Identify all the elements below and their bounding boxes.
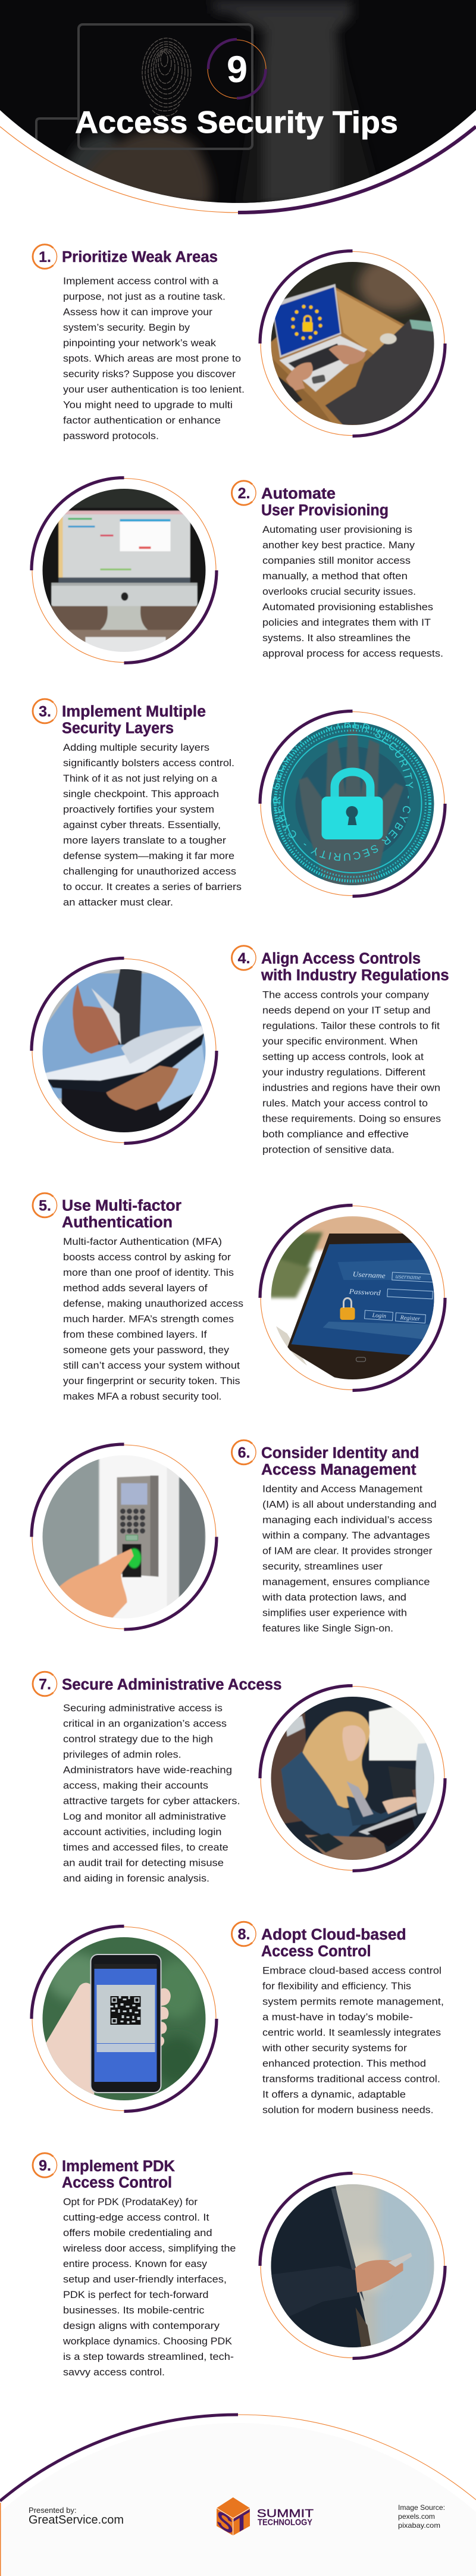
panel: tip 3 <box>32 698 447 908</box>
body text: more than one proof of identity. This <box>63 1267 234 1278</box>
heading: User Provisioning <box>261 502 389 519</box>
number badge <box>33 245 57 268</box>
big number 9: 9 <box>227 49 248 90</box>
body text: system permits remote management, <box>262 1996 444 2007</box>
body text: businesses. Its mobile-centric <box>63 2305 205 2316</box>
heading: Prioritize Weak Areas <box>62 249 218 266</box>
heading: Secure Administrative Access <box>62 1676 281 1693</box>
body text: another key best practice. Many <box>262 539 415 551</box>
body text: more layers translate to a tougher <box>63 835 226 846</box>
body text: someone gets your password, they <box>63 1344 230 1356</box>
panel: tip 6 <box>32 1440 437 1634</box>
body text: Automated provisioning establishes <box>262 601 433 613</box>
body text: and aiding in forensic analysis. <box>63 1873 209 1884</box>
coat <box>281 1751 362 1837</box>
body text: your user authentication is too lenient. <box>63 383 245 395</box>
number badge: 6. <box>238 1444 250 1461</box>
logo <box>217 2497 314 2541</box>
heading <box>261 1926 406 1960</box>
header ring: purple half <box>238 127 476 213</box>
logo cube: S <box>217 2505 233 2541</box>
body text: transforms traditional access control. <box>262 2073 440 2085</box>
body text: features like Single Sign-on. <box>262 1623 393 1634</box>
number badge: 3. <box>39 704 51 720</box>
body text: manually, a method that often <box>262 570 408 582</box>
photo: tablet login screen: Register <box>399 1314 420 1322</box>
body text: workplace dynamics. Choosing PDK <box>62 2335 233 2347</box>
logo cube: T <box>233 2505 250 2541</box>
body text: Opt for PDK (ProdataKey) for <box>63 2196 198 2207</box>
heading: Implement Multiple <box>62 704 206 720</box>
photo: phone showing QR code <box>32 1926 217 2111</box>
number badge <box>231 946 256 970</box>
body text: critical in an organization’s access <box>63 1718 227 1729</box>
panel: tip 5 <box>33 1193 445 1402</box>
footer ring: orange half <box>238 2415 476 2500</box>
body text: simplifies user experience with <box>262 1607 407 1618</box>
number badge <box>231 481 256 505</box>
body text: solution for modern business needs. <box>262 2104 434 2116</box>
heading <box>261 1445 419 1478</box>
body text: regulations. Tailor these controls to fit <box>262 1020 440 1031</box>
lock and stars <box>292 305 322 340</box>
body text: your specific environment. When <box>262 1036 418 1047</box>
body text: setting up access controls, look at <box>262 1051 424 1062</box>
body text: systems. It also streamlines the <box>262 632 411 644</box>
heading <box>261 950 449 983</box>
body text <box>63 742 242 908</box>
body text: Log and monitor all administrative <box>63 1811 226 1822</box>
body text: security, streamlines user <box>262 1561 383 1572</box>
body text: method adds several layers of <box>63 1282 208 1294</box>
body text: times and accessed files, to create <box>63 1842 228 1853</box>
heading: with Industry Regulations <box>261 967 449 983</box>
footer ring: purple half <box>0 2415 238 2501</box>
body text: management, ensures compliance <box>262 1576 430 1587</box>
body text: PDK is perfect for tech-forward <box>63 2289 208 2300</box>
number badge <box>33 2153 57 2177</box>
body text: access, making their accounts <box>63 1780 208 1791</box>
body text <box>63 275 245 442</box>
panel: tip 2 <box>32 477 443 663</box>
body text <box>262 524 443 659</box>
body text: from these combined layers. If <box>63 1329 207 1340</box>
body text: approval process for access requests. <box>262 648 443 659</box>
image source: pixabay.com <box>398 2521 440 2530</box>
number badge <box>33 699 57 723</box>
footer <box>0 2415 476 2576</box>
heading: Adopt Cloud-based <box>261 1926 406 1943</box>
body text: wireless door access, simplifying the <box>62 2243 236 2254</box>
body text <box>63 1236 243 1402</box>
logo wordmark <box>257 2508 314 2528</box>
body text: single checkpoint. This approach <box>63 788 219 800</box>
heading: Implement PDK <box>62 2158 176 2175</box>
logo cube <box>217 2497 250 2541</box>
heading <box>62 1198 181 1231</box>
body text: Administrators have wide-reaching <box>63 1765 232 1775</box>
body text: managing each individual’s access <box>262 1515 432 1525</box>
body text: centric world. It seamlessly integrates <box>262 2027 441 2038</box>
body text: with data protection laws, and <box>262 1592 406 1603</box>
seal lettering: CYBER SECURITY - CYBER SECURITY - CYBER SECURITY - <box>273 722 413 861</box>
body text: companies still monitor access <box>262 555 411 566</box>
body text: much harder. MFA’s strength comes <box>63 1313 234 1325</box>
body text: an attacker must clear. <box>63 897 173 908</box>
lock <box>334 772 370 797</box>
panel: tip 7 <box>33 1672 445 1884</box>
number badge <box>33 1672 57 1696</box>
number badge <box>33 1193 57 1217</box>
body text: security risks? Suppose you discover <box>63 368 236 380</box>
body text: It offers a dynamic, adaptable <box>262 2088 406 2100</box>
body text: enhanced protection. This method <box>262 2057 426 2069</box>
photo: tablet login screen <box>260 1205 445 1391</box>
body text: protection of sensitive data. <box>262 1144 394 1155</box>
body text: Implement access control with a <box>63 275 219 287</box>
body text: your fingerprint or security token. This <box>63 1375 240 1387</box>
heading: Align Access Controls <box>261 950 421 967</box>
body text: entire process. Known for easy <box>63 2258 208 2269</box>
body text: Embrace cloud-based access control <box>262 1965 441 1977</box>
body text: against cyber threats. Essentially, <box>63 819 221 830</box>
body text: of IAM are clear. It provides stronger <box>262 1545 433 1556</box>
heading: Automate <box>261 486 336 502</box>
number badge <box>231 1922 256 1946</box>
heading: Use Multi-factor <box>62 1198 181 1214</box>
title: Access Security Tips <box>75 105 398 140</box>
body text: within a company. The advantages <box>262 1530 430 1541</box>
panel: tip 4 <box>32 946 449 1155</box>
body text: to occur. It creates a series of barriers <box>63 881 242 892</box>
body text: cutting-edge access control. It <box>63 2212 209 2223</box>
photo: cyber security lock seal <box>258 710 447 898</box>
body text: these requirements. Doing so ensures <box>262 1113 441 1124</box>
image source: Image Source: <box>398 2503 445 2512</box>
hair <box>302 1712 369 1808</box>
body text: spots. Which areas are most prone to <box>63 352 241 364</box>
body text: control strategy due to the high <box>63 1734 213 1744</box>
number badge: 4. <box>238 950 250 967</box>
number badge: 5. <box>39 1198 51 1214</box>
body text: savvy access control. <box>63 2366 165 2378</box>
body text: password protocols. <box>63 430 159 442</box>
body text <box>262 1484 437 1634</box>
body text <box>262 1965 444 2116</box>
panel: tip 9 <box>33 2153 445 2378</box>
image source: pexels.com <box>398 2512 435 2521</box>
body text: still can’t access your system without <box>63 1360 240 1371</box>
number ring <box>208 39 266 98</box>
photo: businessman holding phone <box>260 2173 445 2359</box>
logo wordmark: TECHNOLOGY <box>258 2518 312 2528</box>
body text: (IAM) is all about understanding and <box>262 1499 437 1510</box>
QR code <box>111 1996 140 2025</box>
photo: fingerprint access reader <box>32 1444 217 1629</box>
photo: tablet login screen: Password <box>348 1287 381 1297</box>
heading: Access Management <box>261 1462 416 1478</box>
body text: Identity and Access Management <box>262 1484 422 1494</box>
heading: Consider Identity and <box>261 1445 419 1462</box>
footer panel <box>0 2423 476 2576</box>
body text: both compliance and effective <box>262 1129 409 1139</box>
footer left edge line <box>0 2503 1 2576</box>
body text: Automating user provisioning is <box>262 524 412 535</box>
presented by <box>29 2506 124 2527</box>
body text: Assess how it can improve your <box>63 306 212 318</box>
body text <box>62 2196 236 2378</box>
photo: hands leafing through binder <box>32 958 217 1143</box>
body text: design aligns with contemporary <box>63 2320 220 2331</box>
heading: Access Control <box>261 1943 371 1960</box>
body text: overlooks crucial security issues. <box>262 586 416 597</box>
photo: desktop monitor <box>32 477 217 663</box>
body text: privileges of admin roles. <box>63 1749 181 1760</box>
body text: is a step towards streamlined, tech- <box>63 2351 234 2362</box>
body text: proactively fortifies your system <box>63 804 214 815</box>
header ring: orange half <box>0 127 238 213</box>
body text: factor authentication or enhance <box>63 414 221 426</box>
body text: significantly bolsters access control. <box>63 757 234 769</box>
body text: defense, making unauthorized access <box>63 1298 243 1309</box>
photo: woman with laptop in car <box>260 1686 445 1871</box>
photo: laptop with EU lock <box>260 251 445 436</box>
body text: You might need to upgrade to multi <box>63 399 233 411</box>
body text: your industry regulations. Different <box>262 1067 425 1078</box>
body text: attractive targets for cyber attackers. <box>63 1796 240 1806</box>
number badge: 8. <box>238 1926 250 1943</box>
header photo: fingerprint scan <box>0 0 476 205</box>
fingerprint <box>142 38 191 116</box>
body text: purpose, not just as a routine task. <box>63 291 226 302</box>
body text: with other security systems for <box>262 2042 407 2054</box>
photo: tablet login screen: username <box>395 1273 421 1281</box>
logo wordmark: SUMMIT <box>257 2508 314 2519</box>
heading <box>261 486 389 519</box>
body text: The access controls your company <box>262 989 430 1000</box>
photo: tablet login screen: Login <box>371 1312 386 1320</box>
body text: setup and user-friendly interfaces, <box>63 2274 227 2285</box>
panel: tip 1 <box>33 245 445 442</box>
number badge: 7. <box>39 1676 51 1693</box>
body text: offers mobile credentialing and <box>63 2227 212 2238</box>
body text: challenging for unauthorized access <box>63 866 236 877</box>
body text: boosts access control by asking for <box>63 1251 231 1263</box>
body text: for flexibility and efficiency. This <box>262 1980 411 1992</box>
heading: Authentication <box>62 1214 173 1231</box>
body text <box>262 989 441 1155</box>
number badge: 1. <box>39 249 51 266</box>
body text: account activities, including login <box>63 1826 221 1837</box>
heading: Security Layers <box>62 720 174 737</box>
body text: needs depend on your IT setup and <box>262 1005 431 1016</box>
number badge: 2. <box>238 485 250 502</box>
body text: an audit trail for detecting misuse <box>63 1857 224 1868</box>
body text: Securing administrative access is <box>63 1703 223 1713</box>
body text: Think of it as not just relying on a <box>63 773 218 784</box>
heading <box>62 2158 176 2191</box>
header <box>0 0 476 213</box>
body text: pinpointing your network’s weak <box>63 337 217 349</box>
body text: Adding multiple security layers <box>63 742 209 753</box>
body text: a must-have in today’s mobile- <box>262 2011 413 2023</box>
heading <box>62 704 206 737</box>
presented by: Presented by: <box>29 2506 77 2515</box>
login form: Username <box>352 1270 386 1280</box>
body text <box>63 1703 240 1884</box>
number badge: 9. <box>39 2157 51 2174</box>
body text: industries and regions have their own <box>262 1082 440 1093</box>
body text: Multi-factor Authentication (MFA) <box>63 1236 222 1247</box>
scan frames <box>79 24 252 149</box>
body text: makes MFA a robust security tool. <box>63 1391 221 1402</box>
body text: policies and integrates them with IT <box>262 617 431 628</box>
body text: defense system—making it far more <box>63 850 234 861</box>
presented by: GreatService.com <box>29 2513 124 2527</box>
body text: system’s security. Begin by <box>63 321 190 333</box>
heading: Access Control <box>62 2174 172 2191</box>
panel: tip 8 <box>32 1922 444 2116</box>
number badge <box>231 1440 256 1465</box>
body text: rules. Match your access control to <box>262 1098 428 1109</box>
image source <box>398 2503 445 2530</box>
